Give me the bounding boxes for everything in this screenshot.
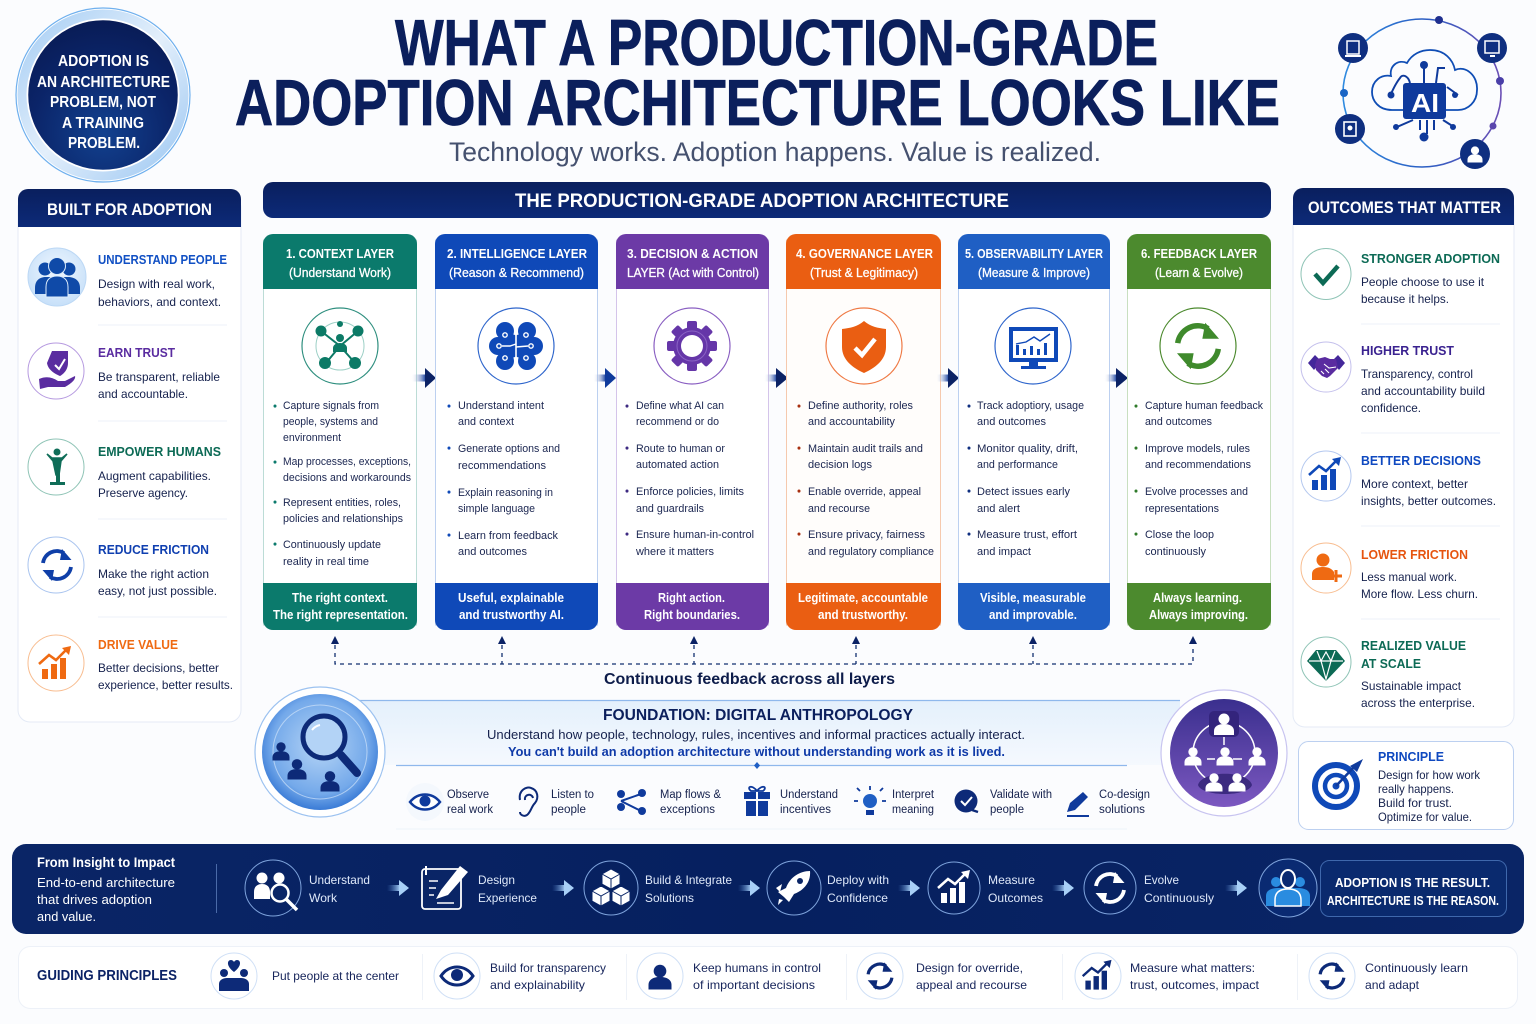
step: measure outcomes: Outcomes	[988, 891, 1043, 905]
bullets: and recourse	[808, 503, 870, 515]
feedback caption: Continuous feedback across all layers	[604, 671, 895, 688]
bullets: Map processes, exceptions,	[283, 456, 411, 468]
feedback loop dashed connector	[331, 636, 1197, 664]
item: better decisions: insights, better outcomes.	[1361, 494, 1496, 508]
column footer	[616, 583, 769, 630]
column header: (Learn & Evolve)	[1155, 265, 1243, 280]
title	[235, 6, 1280, 139]
bullets: automated action	[636, 459, 719, 471]
item: map flows and exceptions	[617, 789, 721, 816]
item: reduce friction	[28, 537, 217, 598]
panel: 5 observability layer	[958, 234, 1110, 630]
arrow: layer 4 to 5	[936, 368, 959, 388]
step: deploy with confidence: Confidence	[827, 891, 888, 905]
bullets: Ensure privacy, fairness	[808, 529, 926, 541]
panel: foundation digital anthropology	[360, 700, 1180, 829]
column header: (Trust & Legitimacy)	[810, 265, 918, 280]
item: interpret meaning: Interpret	[892, 789, 935, 801]
column header	[616, 234, 769, 289]
band intro text: End-to-end architecture	[37, 875, 175, 890]
item: map flows and exceptions: Map flows &	[660, 789, 721, 801]
bullets: Learn from feedback	[458, 530, 559, 542]
bullets: and accountability	[808, 416, 896, 428]
icon: network	[302, 308, 378, 384]
bullets: Understand intent	[458, 400, 544, 412]
item: lower friction: LOWER FRICTION	[1361, 548, 1468, 562]
item: realized value at scale: AT SCALE	[1361, 657, 1421, 671]
bullets: Detect issues early	[977, 486, 1071, 498]
item: understand people	[28, 248, 227, 309]
bullets	[275, 400, 412, 568]
icon: monitor chart	[995, 308, 1071, 384]
arrow	[1225, 880, 1247, 896]
principle: humans in control	[637, 953, 821, 999]
guiding principles heading: GUIDING PRINCIPLES	[37, 968, 177, 984]
column header: 4. GOVERNANCE LAYER	[796, 246, 934, 261]
item: earn trust: and accountable.	[98, 387, 188, 401]
bullets: decisions and workarounds	[283, 472, 412, 484]
column footer: Legitimate, accountable	[798, 591, 928, 605]
callout: principle: Optimize for value.	[1378, 810, 1472, 824]
bullets: continuously	[1145, 546, 1207, 558]
item: lower friction	[1301, 543, 1478, 601]
bullets: Represent entities, roles,	[283, 497, 401, 509]
step: understand work: Work	[309, 891, 338, 905]
principle: learn and adapt: Continuously learn	[1365, 961, 1468, 975]
item: reduce friction: easy, not just possible.	[98, 584, 217, 598]
item: empower humans: Augment capabilities.	[98, 469, 211, 483]
item: realized value at scale: Sustainable impact	[1361, 679, 1462, 693]
panel header	[1293, 188, 1514, 225]
column header: (Reason & Recommend)	[449, 265, 584, 280]
panel header: OUTCOMES THAT MATTER	[1308, 199, 1501, 217]
panel: outcomes that matter	[1293, 188, 1514, 727]
bullets: representations	[1145, 503, 1220, 515]
principle: people at the center: Put people at the center	[272, 969, 399, 983]
principle: transparency and explainability	[434, 953, 606, 999]
column footer: and improvable.	[989, 608, 1077, 622]
item: realized value at scale: across the enterprise.	[1361, 696, 1475, 710]
item: co-design solutions	[1067, 789, 1150, 817]
bullets: Enforce policies, limits	[636, 486, 745, 498]
item: listen to people: people	[551, 804, 586, 816]
icon: gear	[654, 308, 730, 384]
panel: 1 context layer	[263, 234, 417, 630]
callout: adoption badge: PROBLEM.	[68, 135, 140, 152]
callout: adoption is the result	[1320, 860, 1506, 916]
column footer: and trustworthy AI.	[459, 608, 564, 622]
item: understand incentives	[744, 787, 838, 816]
principle: learn and adapt: and adapt	[1365, 978, 1420, 992]
column header: (Understand Work)	[289, 265, 391, 280]
bullets: and outcomes	[1145, 416, 1213, 428]
panel: from insight to impact	[12, 844, 1524, 934]
column footer	[786, 583, 941, 630]
bullets	[627, 400, 754, 558]
callout: principle	[1298, 742, 1514, 830]
panel: built for adoption	[18, 189, 241, 722]
column header	[958, 234, 1110, 289]
callout: adoption is the result: ADOPTION IS THE RESULT.	[1335, 876, 1490, 890]
item: validate with people	[954, 789, 1052, 816]
step: evolve continuously: Continuously	[1144, 891, 1214, 905]
step: build and integrate solutions: Build & Integrate	[645, 873, 732, 887]
column footer: and trustworthy.	[818, 608, 908, 622]
bullets: and performance	[977, 459, 1058, 471]
panel: 4 governance layer	[786, 234, 941, 630]
item: map flows and exceptions: exceptions	[660, 804, 715, 816]
column footer	[263, 583, 417, 630]
principle: override and recourse: Design for override,	[916, 961, 1023, 975]
step: build and integrate solutions: Solutions	[645, 891, 694, 905]
item: understand people: Design with real work,	[98, 277, 215, 291]
item: higher trust	[1301, 342, 1485, 415]
column footer: Right action.	[658, 591, 725, 605]
principle: measure what matters: trust, outcomes, impact	[1130, 978, 1260, 992]
bullets: Enable override, appeal	[808, 486, 921, 498]
item: interpret meaning	[854, 786, 935, 816]
item: stronger adoption	[1301, 248, 1500, 306]
icon: shield	[826, 308, 902, 384]
item: observe real work: real work	[447, 804, 493, 816]
column header: 5. OBSERVABILITY LAYER	[965, 246, 1104, 261]
bullets: Capture human feedback	[1145, 400, 1264, 412]
item: lower friction: Less manual work.	[1361, 570, 1457, 584]
item: validate with people: people	[990, 804, 1024, 816]
bullets: and recommendations	[1145, 459, 1252, 471]
principle: measure what matters: Measure what matters:	[1130, 961, 1255, 975]
principle: learn and adapt	[1309, 953, 1468, 999]
bullets: Define authority, roles	[808, 400, 914, 412]
item: drive value	[28, 635, 233, 692]
callout: adoption badge: PROBLEM, NOT	[50, 94, 156, 111]
principle: override and recourse: appeal and recourse	[916, 978, 1027, 992]
item: earn trust: Be transparent, reliable	[98, 370, 220, 384]
panel: 6 feedback layer	[1127, 234, 1271, 630]
bullets: policies and relationships	[283, 513, 404, 525]
center banner heading: THE PRODUCTION-GRADE ADOPTION ARCHITECTURE	[515, 191, 1009, 212]
band intro text	[37, 854, 175, 924]
step: measure outcomes	[928, 862, 1043, 914]
step: design experience	[422, 866, 537, 909]
item: better decisions: BETTER DECISIONS	[1361, 454, 1481, 468]
principle: transparency and explainability: and explainability	[490, 978, 585, 992]
center banner heading	[263, 182, 1271, 218]
bullets	[1136, 400, 1264, 558]
column header: LAYER (Act with Control)	[627, 265, 759, 280]
column header: (Measure & Improve)	[978, 265, 1090, 280]
bullets	[449, 400, 560, 558]
arrow	[552, 880, 574, 896]
item: understand people: UNDERSTAND PEOPLE	[98, 253, 227, 267]
item: earn trust	[28, 343, 220, 401]
column footer: The right representation.	[273, 608, 408, 622]
principle: humans in control: Keep humans in control	[693, 961, 821, 975]
callout: adoption is the result: ARCHITECTURE IS THE REASON.	[1327, 894, 1499, 908]
item: listen to people	[520, 788, 594, 816]
column footer	[1127, 583, 1271, 630]
item: realized value at scale	[1301, 637, 1475, 710]
foundation title: FOUNDATION: DIGITAL ANTHROPOLOGY	[603, 707, 914, 724]
step: evolve continuously	[1084, 862, 1214, 914]
column header	[263, 234, 417, 289]
item: understand incentives: incentives	[780, 804, 831, 816]
bullets	[799, 400, 934, 558]
item: reduce friction: REDUCE FRICTION	[98, 543, 209, 557]
bullets: Generate options and	[458, 443, 560, 455]
callout: adoption badge: AN ARCHITECTURE	[37, 74, 170, 91]
column header	[1127, 234, 1271, 289]
step: build and integrate solutions	[584, 861, 732, 915]
column header	[786, 234, 941, 289]
item: higher trust: and accountability build	[1361, 384, 1485, 398]
callout: principle: Build for trust.	[1378, 796, 1452, 810]
bullets: Define what AI can	[636, 400, 724, 412]
title: WHAT A PRODUCTION-GRADE	[395, 6, 1158, 79]
icon: magnifier and people	[255, 687, 385, 817]
bullets: reality in real time	[283, 556, 369, 568]
column footer: Always improving.	[1149, 608, 1248, 622]
step: deploy with confidence	[767, 861, 889, 915]
item: stronger adoption: STRONGER ADOPTION	[1361, 252, 1500, 266]
band intro text: that drives adoption	[37, 892, 152, 907]
bullets: and regulatory compliance	[808, 546, 934, 558]
bullets: where it matters	[635, 546, 715, 558]
bullets: Route to human or	[636, 443, 725, 455]
icon: people network	[1161, 690, 1287, 816]
bullets: Capture signals from	[283, 400, 379, 412]
subtitle: Technology works. Adoption happens. Value is realized.	[449, 137, 1101, 167]
item: better decisions	[1301, 451, 1496, 508]
item: listen to people: Listen to	[551, 789, 594, 801]
step: design experience: Experience	[478, 891, 537, 905]
bullets: Close the loop	[1145, 529, 1214, 541]
item: co-design solutions: Co-design	[1099, 789, 1150, 801]
bullets: Continuously update	[283, 539, 381, 551]
callout: adoption badge	[16, 8, 190, 182]
column header	[435, 234, 598, 289]
bullets: and outcomes	[977, 416, 1047, 428]
item: co-design solutions: solutions	[1099, 804, 1145, 816]
icon: green cycle	[1160, 308, 1236, 384]
item: stronger adoption: because it helps.	[1361, 292, 1449, 306]
callout: adoption badge: ADOPTION IS	[58, 53, 149, 70]
bullets: and impact	[977, 546, 1031, 558]
bullets: Explain reasoning in	[458, 487, 553, 499]
bullets: Monitor quality, drift,	[977, 443, 1078, 455]
bullets: environment	[283, 432, 341, 444]
bullets: simple language	[458, 503, 535, 515]
column footer: Visible, measurable	[980, 591, 1086, 605]
icon: target	[1315, 759, 1363, 807]
item: stronger adoption: People choose to use it	[1361, 275, 1485, 289]
foundation description	[487, 727, 1025, 759]
panel: 2 intelligence layer	[435, 234, 598, 630]
column footer: Right boundaries.	[644, 608, 740, 622]
bullets: and alert	[977, 503, 1020, 515]
item: drive value: experience, better results.	[98, 678, 233, 692]
arrow: layer 1 to 2	[411, 368, 436, 388]
item: observe real work	[406, 783, 493, 821]
arrow	[898, 880, 920, 896]
item: understand incentives: Understand	[780, 789, 838, 801]
panel: guiding principles	[18, 946, 1518, 1008]
panel: 3 decision and action layer	[616, 234, 769, 630]
item: understand people: behaviors, and context.	[98, 295, 221, 309]
bullets: and context	[458, 416, 514, 428]
bullets: recommendations	[458, 460, 547, 472]
item: realized value at scale: REALIZED VALUE	[1361, 639, 1466, 653]
bullets: people, systems and	[283, 416, 378, 428]
panel header: BUILT FOR ADOPTION	[47, 200, 212, 219]
bullets: and guardrails	[636, 503, 705, 515]
item: better decisions: More context, better	[1361, 477, 1468, 491]
bullets: decision logs	[808, 459, 873, 471]
bullets: Maintain audit trails and	[808, 443, 923, 455]
callout: principle: PRINCIPLE	[1378, 750, 1444, 764]
arrow	[738, 880, 760, 896]
step: deploy with confidence: Deploy with	[827, 873, 889, 887]
arrow: layer 5 to 6	[1104, 368, 1128, 388]
column header: 6. FEEDBACK LAYER	[1141, 246, 1258, 261]
item: validate with people: Validate with	[990, 789, 1052, 801]
principle: transparency and explainability: Build for transparency	[490, 961, 606, 975]
item: lower friction: More flow. Less churn.	[1361, 587, 1478, 601]
foundation description: Understand how people, technology, rules, incentives and informal practices actually interact.	[487, 727, 1025, 742]
column footer: Useful, explainable	[458, 591, 564, 605]
bullets: Improve models, rules	[1145, 443, 1251, 455]
column header: 1. CONTEXT LAYER	[286, 246, 395, 261]
item: empower humans: EMPOWER HUMANS	[98, 445, 221, 459]
column footer	[958, 583, 1110, 630]
foundation description: You can't build an adoption architecture without understanding work as it is lived.	[508, 744, 1005, 759]
item: drive value: DRIVE VALUE	[98, 638, 178, 652]
arrow	[1052, 880, 1074, 896]
item: reduce friction: Make the right action	[98, 567, 209, 581]
item: higher trust: HIGHER TRUST	[1361, 344, 1454, 358]
step: understand work	[245, 860, 370, 916]
bullets: Ensure human-in-control	[636, 529, 754, 541]
icon: people result	[1259, 859, 1317, 917]
item: drive value: Better decisions, better	[98, 661, 219, 675]
step: understand work: Understand	[309, 873, 370, 887]
callout: principle: really happens.	[1378, 782, 1454, 796]
bullets: and outcomes	[458, 546, 528, 558]
column footer: The right context.	[292, 591, 388, 605]
item: higher trust: confidence.	[1361, 401, 1421, 415]
column footer: Always learning.	[1153, 591, 1242, 605]
item: interpret meaning: meaning	[892, 804, 934, 816]
column header: 3. DECISION & ACTION	[627, 246, 758, 261]
callout: adoption badge: A TRAINING	[62, 115, 144, 132]
icon: AI cloud network: AI	[1411, 88, 1439, 118]
arrow: layer 3 to 4	[764, 368, 788, 388]
principle: measure what matters	[1075, 953, 1260, 999]
item: empower humans: Preserve agency.	[98, 486, 188, 500]
arrow	[387, 880, 409, 896]
panel header	[18, 189, 241, 227]
bullets: Track adoptiory, usage	[977, 400, 1084, 412]
item: empower humans	[28, 439, 221, 500]
band intro text: and value.	[37, 909, 96, 924]
band intro text: From Insight to Impact	[37, 854, 175, 870]
step: design experience: Design	[478, 873, 515, 887]
bullets	[969, 400, 1084, 558]
item: higher trust: Transparency, control	[1361, 367, 1473, 381]
callout: principle: Design for how work	[1378, 768, 1481, 782]
principle: humans in control: of important decisions	[693, 978, 815, 992]
step: evolve continuously: Evolve	[1144, 873, 1179, 887]
step: measure outcomes: Measure	[988, 873, 1035, 887]
bullets: recommend or do	[636, 416, 719, 428]
column footer	[435, 583, 598, 630]
item: observe real work: Observe	[447, 789, 489, 801]
icon: brain	[478, 308, 554, 384]
title: ADOPTION ARCHITECTURE LOOKS LIKE	[235, 66, 1280, 139]
arrow: layer 2 to 3	[593, 368, 616, 388]
item: earn trust: EARN TRUST	[98, 346, 175, 360]
bullets: Measure trust, effort	[977, 529, 1077, 541]
column header: 2. INTELLIGENCE LAYER	[447, 246, 588, 261]
bullets: Evolve processes and	[1145, 486, 1248, 498]
icon: AI cloud network	[1335, 16, 1507, 169]
principle: people at the center	[211, 953, 399, 999]
principle: override and recourse	[857, 953, 1027, 999]
